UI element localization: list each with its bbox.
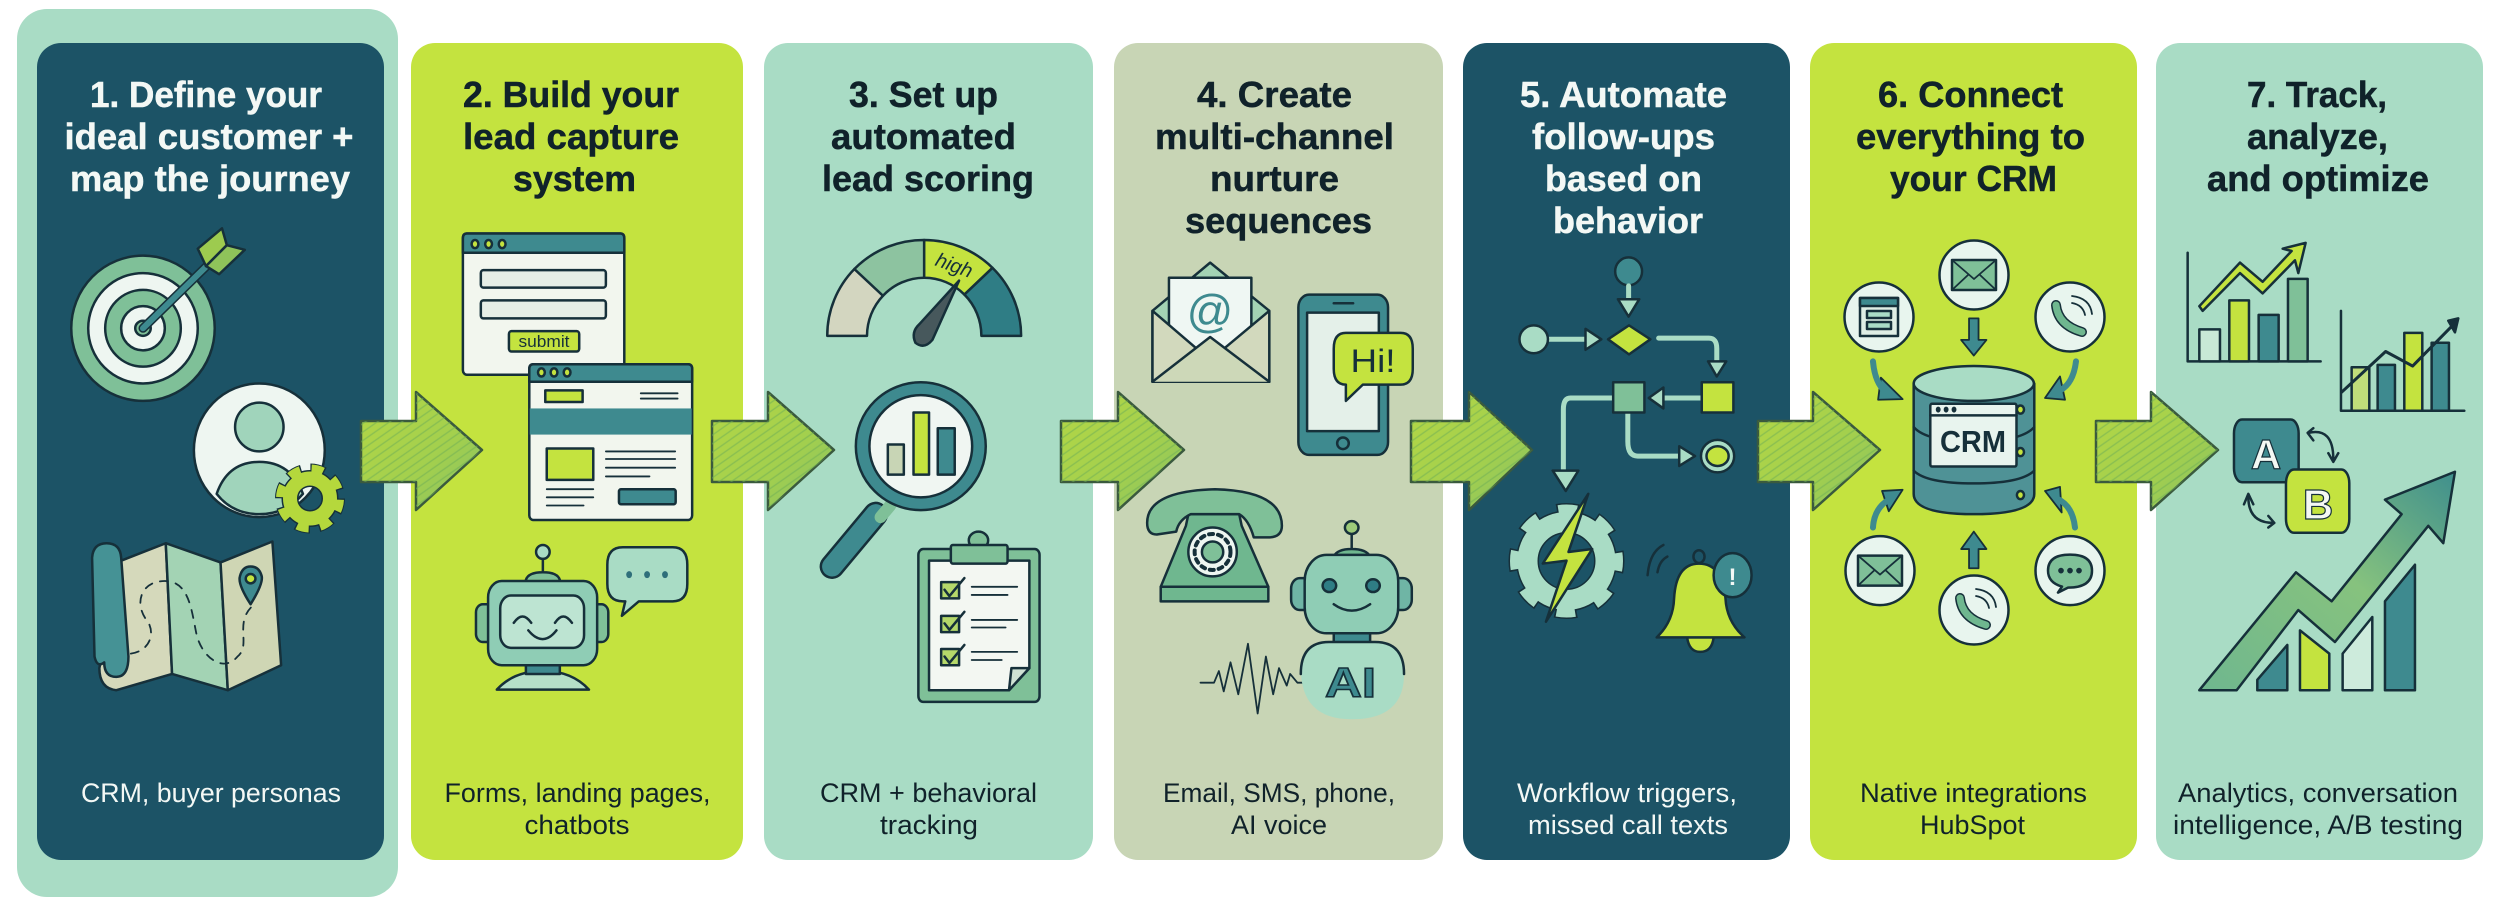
heading: step 4 [1155, 74, 1394, 241]
icon: phone integration [2036, 282, 2104, 352]
icon: alert bell [1648, 545, 1752, 652]
tools: step 4: AI voice [1231, 810, 1327, 840]
icon: large growth arrow with bars [2199, 472, 2455, 690]
panel: step 3 lead scoring [764, 43, 1093, 860]
icon: landing page window [529, 364, 692, 520]
icon: form window with submit: submit [518, 332, 570, 351]
highlight backing for step 1 [17, 9, 398, 897]
icon: gear with lightning bolt [1516, 494, 1616, 622]
icon: A/B test cards: A [2251, 431, 2281, 478]
panel: step 4 nurture sequences [1114, 43, 1443, 860]
icon: workflow diagram [1519, 257, 1734, 491]
arrow: step 2 to 3 [712, 392, 834, 510]
heading: step 2: lead capture [463, 116, 679, 157]
heading: step 1: map the journey [70, 158, 350, 199]
icon: smartphone with SMS bubble [1298, 295, 1413, 455]
tools: step 2: chatbots [524, 810, 630, 840]
heading: step 4: 4. Create [1197, 74, 1352, 115]
icon: CRM database: CRM [1940, 424, 2006, 459]
heading: step 4: multi-channel [1155, 116, 1394, 157]
tools: step 2 [444, 778, 710, 840]
panel: step 2 lead capture [411, 43, 743, 860]
arrow: step 4 to 5 [1411, 392, 1532, 510]
tools: step 7 [2173, 778, 2463, 840]
icon: alert bell: ! [1728, 564, 1736, 591]
icon: CRM database [1914, 366, 2034, 514]
heading: step 3: automated [831, 116, 1016, 157]
tools: step 7: intelligence, A/B testing [2173, 810, 2463, 840]
icon: email envelope [1152, 263, 1269, 382]
heading: step 5: based on [1545, 158, 1702, 199]
tools: step 6: Native integrations [1860, 778, 2087, 808]
panel: step 6 connect to CRM [1810, 43, 2137, 860]
heading: step 5: follow-ups [1532, 116, 1715, 157]
heading: step 6 [1856, 74, 2085, 199]
icon: email integration [1940, 240, 2008, 310]
heading: step 6: your CRM [1890, 158, 2057, 199]
tools: step 4: Email, SMS, phone, [1163, 778, 1395, 808]
heading: step 4: nurture [1210, 158, 1339, 199]
tools: step 5 [1517, 778, 1737, 840]
icon: sync arrows toward CRM [1873, 318, 2076, 568]
arrow: step 6 to 7 [2096, 392, 2218, 510]
arrow: step 3 to 4 [1061, 392, 1184, 510]
arrow: step 1 to 2 [361, 392, 482, 510]
tools: step 2: Forms, landing pages, [444, 778, 710, 808]
icon: journey map [92, 541, 281, 690]
heading: step 3: lead scoring [822, 158, 1034, 199]
tools: step 3: tracking [880, 810, 978, 840]
tools: step 5: missed call texts [1528, 810, 1728, 840]
heading: step 2 [463, 74, 679, 199]
heading: step 1: 1. Define your [90, 74, 322, 115]
icon: score gauge: high [932, 249, 976, 283]
icon: rotary telephone [1147, 489, 1282, 601]
heading: step 5 [1520, 74, 1727, 241]
heading: step 7: 7. Track, [2247, 74, 2387, 115]
icon: smartphone with SMS bubble: Hi! [1350, 343, 1396, 379]
icon: A/B test cards: B [2303, 481, 2333, 528]
tools: step 4 [1163, 778, 1395, 840]
icon: score gauge [827, 240, 1021, 346]
icon: chat integration [2036, 536, 2104, 605]
panel: step 1 define customer [37, 43, 384, 860]
panel: step 5 automate follow-ups [1463, 43, 1790, 860]
icon: A/B test cards [2234, 419, 2349, 533]
icon: form window with submit [463, 234, 624, 375]
heading: step 4: sequences [1185, 200, 1372, 241]
icon: AI voice robot and waveform: AI [1325, 659, 1376, 706]
arrow: step 5 to 6 [1758, 392, 1880, 510]
panel: step 7 track and optimize [2156, 43, 2483, 860]
tools: step 3 [820, 778, 1037, 840]
tools: step 3: CRM + behavioral [820, 778, 1037, 808]
tools: step 6: HubSpot [1920, 810, 2025, 840]
icon: target with arrow [71, 228, 245, 401]
heading: step 6: everything to [1856, 116, 2085, 157]
icon: form integration [1844, 282, 1914, 352]
heading: step 3 [822, 74, 1034, 199]
tools: step 6 [1860, 778, 2087, 840]
heading: step 5: behavior [1553, 200, 1703, 241]
icon: email envelope: @ [1187, 285, 1233, 337]
tools: step 5: Workflow triggers, [1517, 778, 1737, 808]
icon: bar chart with lime trend arrow [2188, 243, 2321, 361]
heading: step 7 [2207, 74, 2429, 199]
icon: chatbot with speech bubble [476, 545, 687, 690]
heading: step 3: 3. Set up [849, 74, 998, 115]
heading: step 6: 6. Connect [1878, 74, 2063, 115]
heading: step 1 [64, 74, 354, 199]
heading: step 1: ideal customer + [64, 116, 354, 157]
icon: customer persona with gear [194, 383, 339, 528]
icon: email integration lower [1846, 536, 1914, 605]
heading: step 2: 2. Build your [463, 74, 679, 115]
heading: step 2: system [513, 158, 636, 199]
heading: step 5: 5. Automate [1520, 74, 1727, 115]
icon: voice integration [1940, 576, 2008, 644]
heading: step 7: and optimize [2207, 158, 2429, 199]
tools: step 7: Analytics, conversation [2178, 778, 2458, 808]
icon: small bar chart with dark trend line [2341, 311, 2464, 411]
icon: checklist clipboard [918, 532, 1040, 702]
tools: step 1: CRM, buyer personas [81, 778, 341, 808]
icon: magnifier over bar chart [832, 382, 986, 566]
heading: step 7: analyze, [2247, 116, 2388, 157]
icon: AI voice robot and waveform [1200, 521, 1412, 719]
